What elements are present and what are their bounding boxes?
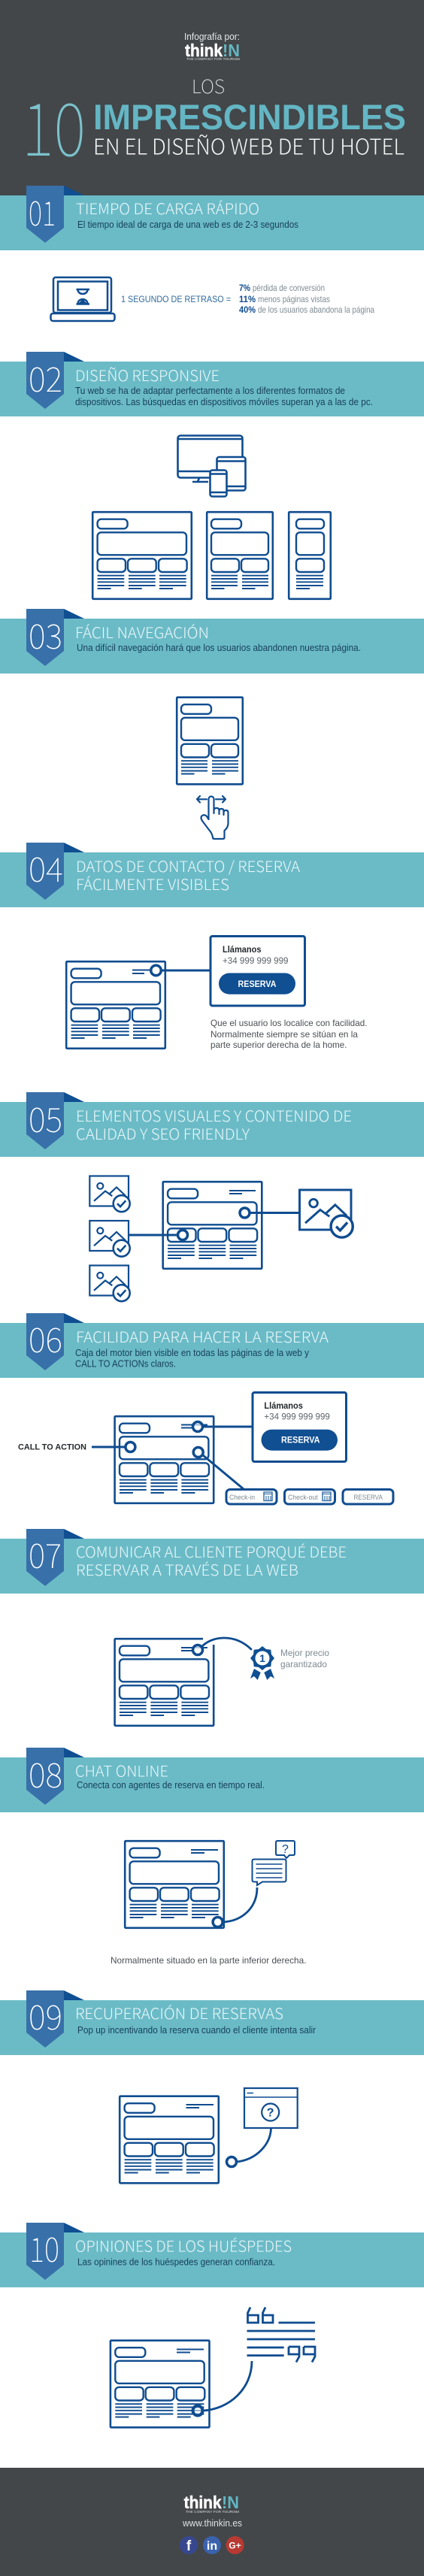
booking popup: +34 999 999 999 [264, 1412, 330, 1422]
icon: image 2 [89, 1221, 130, 1257]
connector and marker [227, 2128, 271, 2166]
section 02 header: Tu web se ha de adaptar perfectamente a los diferentes formatos de [75, 386, 345, 396]
title: 10 [22, 71, 86, 177]
wireframe with chat highlight [125, 1841, 257, 1928]
header logo: THE COMPANY FOR TOURISM [186, 57, 240, 61]
social icons [180, 2536, 244, 2554]
icon: monitor, tablet and phone [177, 436, 245, 496]
section 09 header [0, 1990, 424, 2055]
booking form fields: Check-in [229, 1494, 255, 1501]
wireframe with price highlight [115, 1636, 251, 1726]
section 02 header: dispositivos. Las búsquedas en dispositivos móviles superan ya a las de pc. [75, 397, 373, 407]
section 01 header: TIEMPO DE CARGA RÁPIDO [76, 197, 259, 219]
icon: large image [299, 1190, 353, 1237]
booking form fields: Check-out [288, 1494, 318, 1501]
section 04 header: 04 [29, 843, 63, 891]
section 06 header: FACILIDAD PARA HACER LA RESERVA [76, 1325, 329, 1347]
header credit: Infografía por: [184, 31, 240, 42]
popup window with question [244, 2088, 298, 2128]
icon: image 3 [89, 1266, 130, 1301]
section 03 header: 03 [29, 610, 62, 658]
delay statistics: 40% [239, 304, 256, 315]
section 04 header [0, 843, 424, 907]
section 01 header: 01 [29, 186, 56, 235]
section 01 header [0, 186, 424, 250]
section 08 header: Conecta con agentes de reserva en tiempo real. [77, 1780, 265, 1790]
section 10 header: OPINIONES DE LOS HUÉSPEDES [75, 2234, 292, 2257]
section 01 header: El tiempo ideal de carga de una web es de 2-3 segundos [77, 219, 298, 230]
section 03 header: FÁCIL NAVEGACIÓN [75, 621, 209, 643]
booking form fields [226, 1490, 393, 1504]
icon: medal: 1 [259, 1652, 265, 1664]
section 09 header: Pop up incentivando la reserva cuando el cliente intenta salir [77, 2025, 316, 2036]
section 08 header: CHAT ONLINE [75, 1759, 168, 1781]
price guarantee text: Mejor precio [280, 1648, 329, 1658]
delay statement: 1 SEGUNDO DE RETRASO = [121, 294, 231, 304]
wireframe with call to action highlights [92, 1416, 253, 1503]
icon: swipe hand [197, 796, 229, 839]
wireframe: tablet [207, 512, 273, 599]
title: LOS [192, 72, 225, 99]
section 06 header: Caja del motor bien visible en todas las páginas de la web y [75, 1348, 310, 1358]
section 09 header: RECUPERACIÓN DE RESERVAS [75, 2002, 283, 2024]
ribbon [64, 843, 84, 852]
section 06 header [0, 1313, 424, 1378]
icon: laptop with hourglass [51, 277, 114, 321]
section 06 header: 06 [29, 1313, 62, 1362]
section 05 header: CALIDAD Y SEO FRIENDLY [76, 1122, 250, 1144]
social icons: f [186, 2538, 192, 2554]
ribbon [64, 186, 84, 195]
title: EN EL DISEÑO WEB DE TU HOTEL [93, 131, 404, 161]
social icons: G+ [229, 2541, 241, 2551]
wireframe: desktop [92, 512, 192, 599]
section 05 header: 05 [29, 1093, 62, 1142]
wireframe [120, 2096, 219, 2183]
contact popup: +34 999 999 999 [223, 955, 289, 966]
wireframe: navigation [177, 698, 243, 784]
section 04 header: DATOS DE CONTACTO / RESERVA [76, 855, 300, 876]
ribbon [64, 1748, 84, 1757]
footer panel: THE COMPANY FOR TOURISM [186, 2510, 239, 2514]
booking popup [253, 1392, 346, 1461]
booking popup: RESERVA [281, 1435, 320, 1445]
section 02 header: 02 [29, 353, 62, 401]
section 07 header: 07 [29, 1529, 62, 1578]
title: IMPRESCINDIBLES [93, 97, 406, 137]
icon: chat bubbles [253, 1841, 295, 1885]
delay statistics: de los usuarios abandona la página [258, 304, 374, 315]
wireframe with contact highlight [66, 961, 210, 1049]
section 08 header: 08 [29, 1748, 62, 1797]
section 02 header [0, 352, 424, 416]
social icons: in [207, 2540, 217, 2553]
title [22, 71, 406, 177]
delay statistics: 7% [239, 283, 250, 293]
ribbon [64, 1313, 84, 1323]
icon: chat bubbles: ? [282, 1843, 289, 1856]
section 10 header: 10 [29, 2223, 59, 2272]
price guarantee text [280, 1648, 329, 1669]
section 05 header: ELEMENTOS VISUALES Y CONTENIDO DE [76, 1104, 352, 1126]
section 03 header: Una difícil navegación hará que los usuarios abandonen nuestra página. [77, 643, 361, 653]
section 07 header: COMUNICAR AL CLIENTE PORQUÉ DEBE [76, 1540, 347, 1562]
ribbon [64, 609, 84, 619]
icon: medal [250, 1646, 274, 1680]
delay statistics [239, 283, 374, 315]
popup window with question: ? [267, 2106, 274, 2120]
booking popup: Llámanos [264, 1400, 303, 1411]
contact note: parte superior derecha de la home. [210, 1040, 347, 1050]
footer url: www.thinkin.es [182, 2517, 242, 2529]
ribbon [64, 1092, 84, 1102]
ribbon [64, 1529, 84, 1539]
ribbon [64, 2223, 84, 2232]
section 05 header [0, 1092, 424, 1157]
section 09 header: 09 [29, 1990, 62, 2039]
chat note: Normalmente situado en la parte inferior derecha. [111, 1955, 307, 1966]
contact popup: RESERVA [238, 979, 277, 989]
section 10 header [0, 2223, 424, 2287]
section 04 header: FÁCILMENTE VISIBLES [76, 873, 229, 894]
header logo: !N [223, 41, 240, 60]
section 02 header: DISEÑO RESPONSIVE [75, 364, 220, 386]
header panel [0, 0, 424, 203]
section 03 header [0, 609, 424, 674]
section 07 header [0, 1529, 424, 1594]
section 10 header: Las opinines de los huéspedes generan confianza. [77, 2257, 275, 2267]
delay statistics: menos páginas vistas [258, 294, 330, 304]
wireframe: mobile [289, 512, 331, 599]
delay statistics: 11% [239, 294, 256, 304]
section 07 header: RESERVAR A TRAVÉS DE LA WEB [76, 1558, 298, 1580]
footer panel: !N [222, 2493, 239, 2512]
wireframe with review highlight [111, 2341, 252, 2427]
footer panel [0, 2468, 424, 2576]
booking form fields: RESERVA [353, 1494, 383, 1501]
ribbon [64, 1990, 84, 2000]
price guarantee text: garantizado [280, 1659, 327, 1669]
ribbon [64, 352, 84, 362]
wireframe with image highlights [129, 1182, 300, 1269]
section 06 header: CALL TO ACTIONs claros. [75, 1359, 176, 1370]
contact note [210, 1018, 367, 1050]
call to action label: CALL TO ACTION [18, 1443, 86, 1452]
section 08 header [0, 1748, 424, 1812]
icon: image 1 [89, 1176, 130, 1212]
contact popup: Llámanos [223, 944, 262, 955]
icon: quotation [247, 2308, 315, 2362]
footer logo: think [184, 2493, 222, 2512]
header logo: think [185, 41, 223, 60]
contact popup [210, 937, 305, 1006]
contact note: Que el usuario los localice con facilidad. [210, 1018, 367, 1028]
delay statistics: pérdida de conversión [253, 283, 325, 293]
contact note: Normalmente siempre se sitúan en la [210, 1029, 358, 1040]
